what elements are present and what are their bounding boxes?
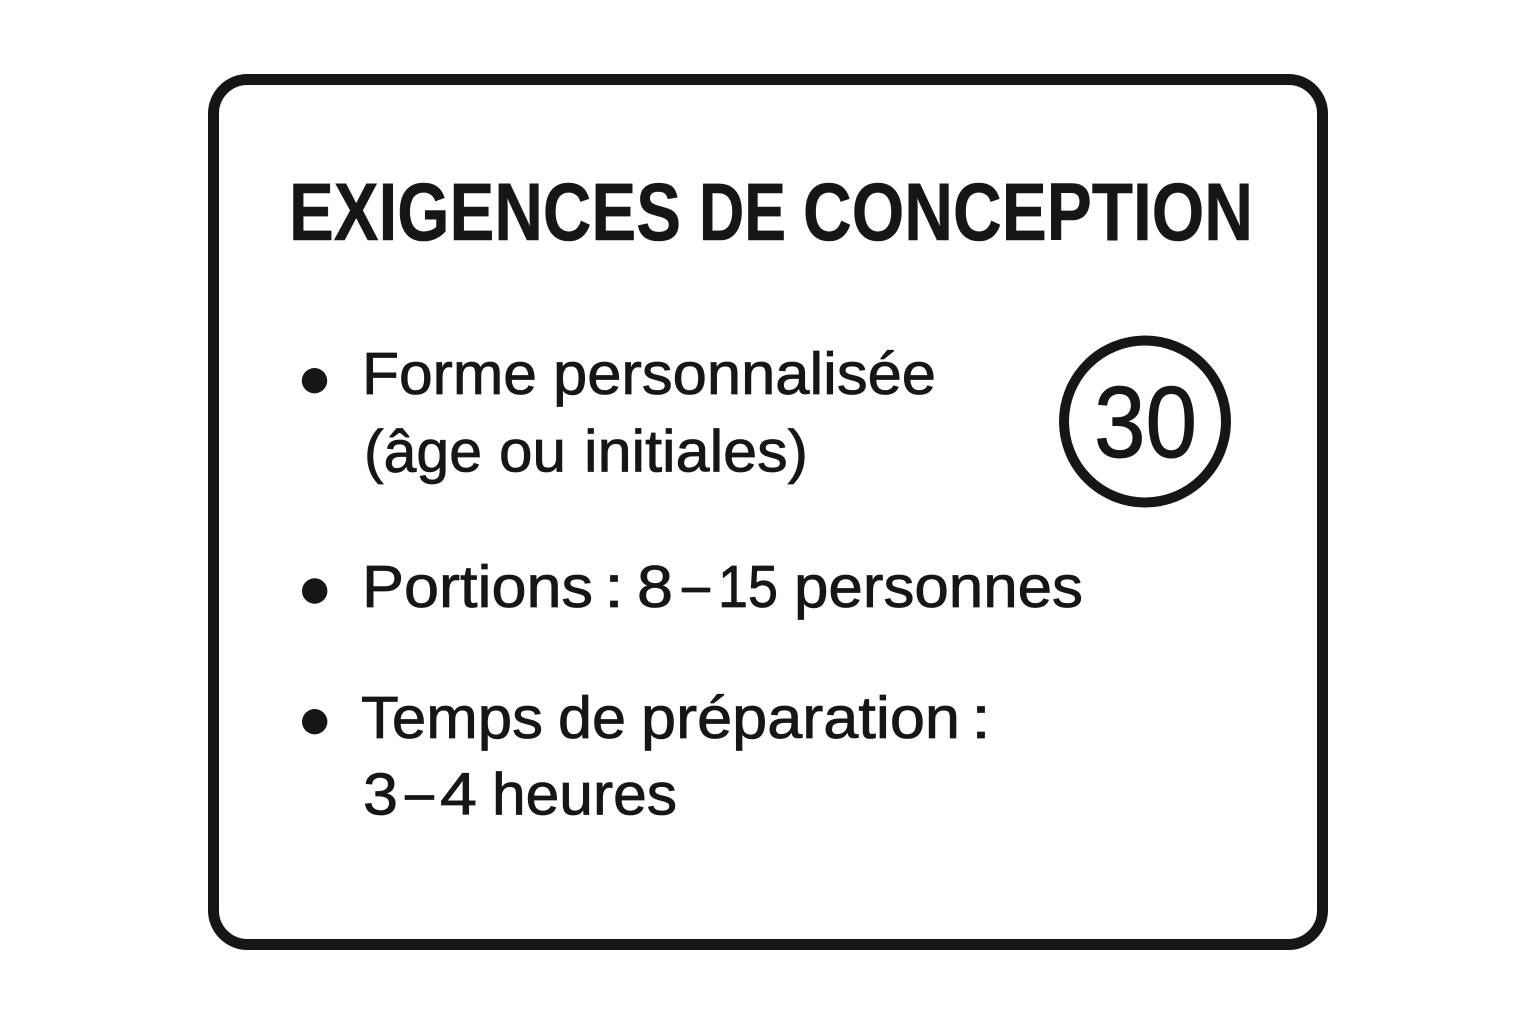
bullet: preparation time: 3: [363, 762, 398, 828]
bullet: custom shape: (âge: [364, 418, 482, 484]
bullet: portions: Portions: [362, 554, 593, 620]
bullet: preparation time: –: [405, 760, 434, 826]
bullet: preparation time: Temps: [361, 685, 543, 751]
bullet: custom shape: [302, 341, 936, 484]
icon: number 30 in circle: [1064, 340, 1226, 502]
bullet: custom shape: ou: [499, 418, 566, 484]
bullet: preparation time: 4: [440, 762, 477, 828]
bullet: portions: [302, 552, 1083, 620]
bullet: custom shape: personnalisée: [553, 341, 936, 407]
bullet: preparation time: :: [971, 685, 991, 751]
bullet: preparation time: heures: [492, 762, 677, 828]
bullet: portions: personnes: [794, 554, 1083, 620]
bullet: preparation time: de: [558, 685, 626, 751]
bullet: portions: –: [682, 552, 710, 618]
bullet: preparation time: [302, 685, 991, 828]
bullet: portions: 15: [718, 554, 778, 620]
title: DE: [699, 167, 786, 258]
title: [289, 167, 1253, 258]
bullet: portions: :: [604, 554, 624, 620]
bullet: preparation time: préparation: [641, 685, 960, 751]
bullet: custom shape: initiales): [584, 418, 808, 484]
panel: design requirements card: [214, 80, 1322, 944]
bullet: portions: 8: [637, 554, 673, 620]
title: EXIGENCES: [289, 167, 681, 258]
bullet: custom shape: Forme: [362, 341, 537, 407]
icon: number 30 in circle: 30: [1094, 367, 1197, 479]
title: CONCEPTION: [803, 167, 1253, 258]
